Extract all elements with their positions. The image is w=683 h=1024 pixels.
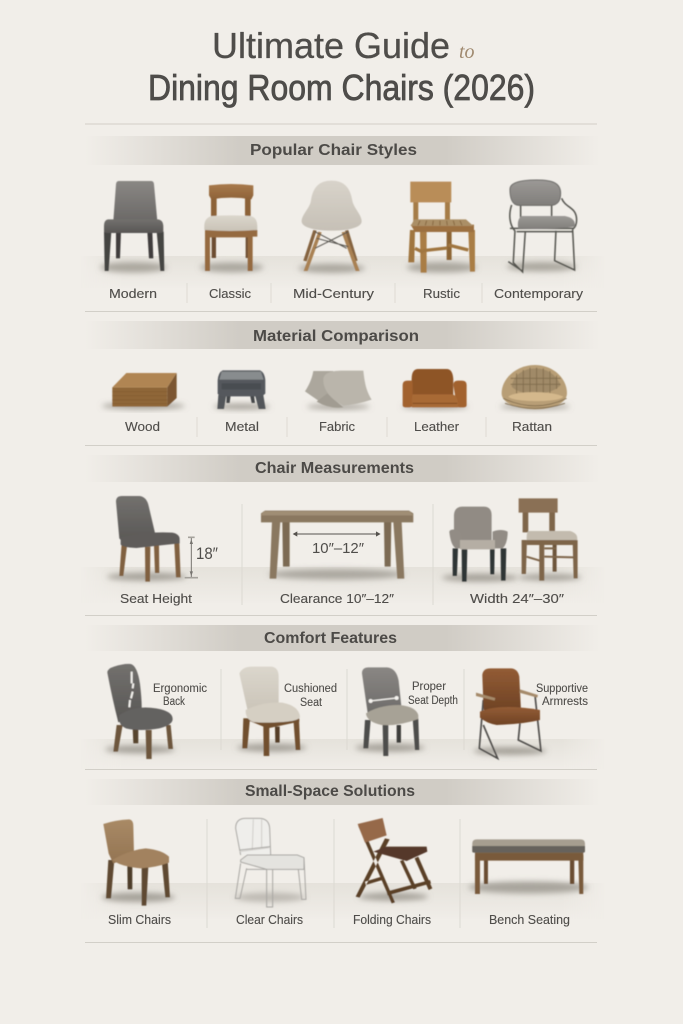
heading: popular chair styles: [85, 136, 600, 165]
text: proper seat depth: Proper: [412, 681, 446, 693]
chair: modern: [100, 181, 167, 273]
text: proper seat depth: [408, 681, 458, 707]
chair: clear acrylic: [235, 818, 306, 907]
chair: folding: [356, 818, 432, 903]
chair: slim: [102, 819, 175, 906]
chair: proper seat depth: [355, 667, 425, 756]
marker: clearance arrow: [293, 531, 381, 537]
label: modern: Modern: [109, 286, 157, 301]
value: 10 to 12 inch: 10″–12″: [312, 540, 365, 557]
heading: chair measurements: [85, 455, 600, 482]
label: wood: Wood: [125, 419, 160, 434]
text: proper seat depth: Seat Depth: [408, 695, 458, 707]
heading: small-space solutions: Small-Space Solutions: [245, 783, 415, 800]
swatch: leather: [402, 369, 468, 409]
text: cushioned seat: [284, 683, 337, 709]
illustration: table clearance: [261, 511, 413, 580]
text: cushioned seat: Seat: [300, 697, 323, 709]
panel: popular chair styles: [80, 136, 605, 303]
label: fabric: Fabric: [319, 419, 355, 434]
title: to: [459, 41, 475, 63]
label: slim chairs: Slim Chairs: [108, 912, 171, 927]
chair: classic: [200, 184, 263, 272]
label: rattan: Rattan: [512, 419, 552, 434]
text: ergonomic back: Back: [163, 696, 185, 708]
heading: material comparison: Material Comparison: [253, 328, 419, 345]
text: supportive armrests: Supportive: [536, 683, 588, 695]
label: width: Width 24″–30″: [470, 591, 564, 606]
label: seat height: Seat Height: [120, 591, 192, 606]
heading: comfort features: [85, 625, 600, 651]
heading: comfort features: Comfort Features: [264, 630, 397, 647]
bench: [468, 839, 588, 894]
title: Ultimate Guide: [212, 25, 450, 66]
infographic: [85, 32, 597, 943]
heading: small-space solutions: [85, 779, 600, 805]
text: supportive armrests: [536, 683, 588, 708]
chair: seat height: [107, 496, 187, 582]
material swatches: [102, 365, 570, 410]
chair: supportive armrests: [473, 668, 547, 758]
chair: cushioned seat: [237, 667, 307, 756]
panel: chair measurements: [80, 455, 605, 606]
panel: comfort features: [102, 625, 588, 761]
solution illustrations: [102, 818, 588, 907]
heading: material comparison: [85, 321, 600, 349]
label: rustic: Rustic: [423, 286, 461, 301]
panel: small-space solutions: [80, 779, 605, 928]
swatch: fabric: [305, 371, 372, 409]
label: classic: Classic: [209, 286, 251, 301]
chair illustrations: [100, 180, 577, 273]
chair: ergonomic back: [105, 664, 175, 759]
text: ergonomic back: Ergonomic: [153, 683, 207, 695]
label: contemporary: Contemporary: [494, 286, 584, 301]
chair: mid-century: [298, 181, 365, 273]
chair: contemporary: [507, 180, 577, 272]
swatch: wood: [102, 373, 185, 409]
label: leather: Leather: [414, 419, 460, 434]
label: clearance: Clearance 10″–12″: [280, 591, 394, 606]
label: bench seating: Bench Seating: [489, 912, 570, 927]
label: mid-century: Mid-Century: [293, 286, 375, 301]
value: 18 inch: 18″: [196, 544, 218, 563]
chair: width side chair: [518, 498, 582, 581]
chair: rustic: [407, 182, 477, 273]
marker: 18 inch seat height: [185, 537, 198, 578]
measurement illustrations: [107, 496, 582, 582]
feature illustrations: [105, 664, 547, 759]
text: supportive armrests: Armrests: [542, 696, 588, 708]
label: folding chairs: Folding Chairs: [353, 912, 431, 927]
panel: material comparison: [85, 321, 600, 437]
text: cushioned seat: Cushioned: [284, 683, 337, 695]
title: Dining Room Chairs (2026): [148, 67, 535, 108]
swatch: rattan: [500, 365, 570, 409]
heading: popular chair styles: Popular Chair Styles: [250, 142, 417, 159]
label: clear chairs: Clear Chairs: [236, 912, 303, 927]
title: [148, 25, 535, 108]
text: ergonomic back: [153, 683, 207, 708]
swatch: metal: [213, 370, 270, 410]
heading: chair measurements: Chair Measurements: [255, 460, 414, 477]
label: metal: Metal: [225, 419, 259, 434]
chair: width armchair: [442, 507, 518, 582]
